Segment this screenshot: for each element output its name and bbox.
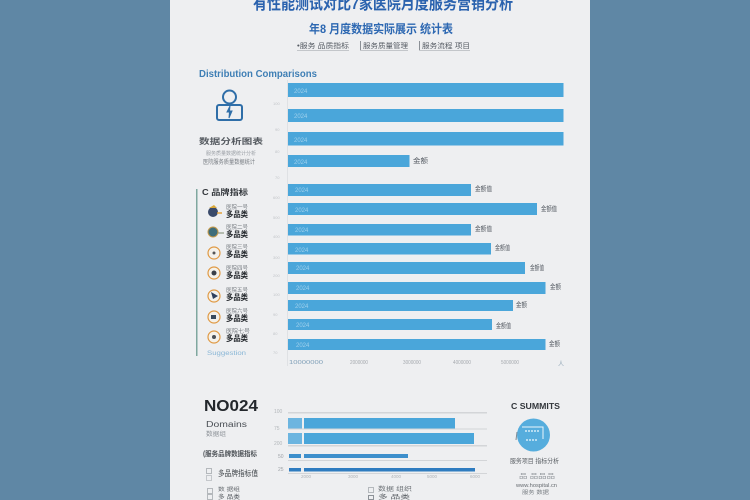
x axis labels: 3000000	[403, 360, 421, 366]
x axis labels: 4000000	[453, 360, 471, 366]
axis tick labels: 500	[273, 215, 280, 220]
bar inner labels: 2024	[294, 138, 308, 144]
legend item 2	[208, 223, 248, 239]
legend item 4	[208, 264, 248, 280]
axis tick labels: 100	[273, 101, 280, 106]
legend panel	[196, 187, 251, 357]
bottom left heading: 数据组	[206, 430, 226, 438]
legend item 1: 医院一号	[226, 203, 248, 211]
chart legend: 数据 组织	[378, 485, 412, 493]
x axis labels	[289, 360, 564, 368]
right column: www.hospital.cn	[516, 483, 557, 489]
right column: 服务 数据	[522, 489, 549, 496]
legend item 6	[208, 307, 248, 323]
tag row: 服务质量管理	[363, 41, 408, 50]
bar value labels: 金额	[413, 156, 428, 165]
bar value labels: 金额	[550, 282, 561, 291]
right column	[510, 402, 561, 496]
bar value labels: 金额值	[495, 243, 510, 252]
bottom left list: 数 据组	[218, 486, 240, 493]
axis tick labels: 300	[273, 255, 280, 260]
legend item 3: 医院三号	[226, 243, 248, 251]
bar inner labels: 2024	[296, 323, 310, 329]
bar value labels: 金额值	[541, 204, 557, 213]
bar value labels: 金额值	[530, 263, 544, 272]
legend footer: Suggestion	[207, 351, 246, 357]
axis tick labels	[273, 101, 280, 355]
legend item 4: 医院四号	[226, 264, 248, 272]
bar inner labels: 2024	[295, 188, 309, 194]
axis tick labels: 80	[273, 331, 278, 336]
axis labels: 2000	[301, 474, 312, 479]
x axis labels: 2000000	[350, 360, 368, 366]
axis tick labels: 100	[273, 292, 280, 297]
legend item 1	[208, 203, 248, 219]
legend item 3	[208, 243, 248, 259]
tag row: •服务 品质指标	[297, 41, 349, 50]
legend item 5	[208, 286, 248, 302]
bar inner labels: 2024	[294, 160, 308, 166]
bar value labels: 金额值	[475, 224, 492, 233]
axis labels: 50	[278, 454, 284, 460]
legend item 7: 医院七号	[226, 327, 251, 335]
icon: blue circle	[516, 418, 550, 452]
axis labels: 25	[278, 467, 284, 473]
legend item 6: 多品类	[226, 313, 248, 323]
right column: 服务项目 指标分析	[510, 456, 559, 465]
tag row	[297, 41, 470, 51]
bars	[288, 83, 564, 350]
grid lines	[288, 412, 487, 474]
axis tick labels: 80	[275, 149, 280, 154]
axis tick labels: 70	[273, 350, 278, 355]
bar inner labels: 2024	[295, 248, 309, 254]
axis tick labels: 70	[275, 175, 280, 180]
axis labels: 200	[274, 441, 283, 447]
summary label: 数据分析图表	[199, 136, 263, 146]
legend item 6: 医院六号	[226, 307, 248, 315]
right column: 品 品品品	[519, 472, 555, 480]
panel: page sheet	[170, 0, 590, 500]
legend item 4: 多品类	[226, 270, 248, 280]
bar inner labels: 2024	[295, 208, 309, 214]
legend heading: C 品牌指标	[202, 187, 248, 197]
section heading: Distribution Comparisons	[199, 69, 317, 80]
bar value labels: 金额	[516, 300, 527, 309]
legend item 5: 多品类	[226, 292, 248, 302]
bar inner labels: 2024	[295, 228, 309, 234]
axis labels: 5000	[427, 474, 438, 479]
bar value labels: 金额	[549, 339, 560, 348]
tag row: 服务流程 项目	[422, 41, 470, 50]
bottom left heading: NO024	[204, 398, 258, 415]
bottom left list: 多品牌指标值	[218, 468, 258, 478]
bottom left list	[203, 449, 258, 500]
main bar chart	[273, 80, 564, 368]
axis labels: 75	[274, 426, 280, 432]
summary label: 服务质量数据统计分析	[206, 150, 256, 157]
icon: person with badge	[217, 90, 242, 120]
legend item 5: 医院五号	[226, 286, 248, 294]
legend item 3: 多品类	[226, 249, 248, 259]
right column: C SUMMITS	[511, 402, 561, 411]
axis tick labels: 90	[273, 312, 278, 317]
bar inner labels: 2024	[296, 266, 310, 272]
bar inner labels: 2024	[294, 114, 308, 120]
bottom left heading: Domains	[206, 420, 247, 429]
bottom left list: (服务品牌数据指标	[203, 449, 257, 458]
bar inner labels: 2024	[295, 304, 309, 310]
x axis labels: 10000000	[289, 360, 323, 366]
axis tick labels: 400	[273, 234, 280, 239]
summary label	[199, 136, 263, 166]
bar value labels: 金额值	[496, 321, 511, 330]
axis labels	[274, 409, 481, 479]
legend item 2: 医院二号	[226, 223, 248, 231]
axis labels: 3000	[348, 474, 359, 479]
legend item 1: 多品类	[226, 209, 248, 219]
bottom bar chart	[274, 409, 487, 500]
axis tick labels: 200	[273, 273, 280, 278]
axis labels: 100	[274, 409, 283, 415]
bar inner labels: 2024	[296, 343, 310, 349]
x axis labels: 5000000	[501, 360, 519, 366]
axis tick labels: 90	[275, 127, 280, 132]
chart legend	[368, 485, 412, 500]
bar inner labels	[294, 89, 310, 349]
bar inner labels: 2024	[296, 286, 310, 292]
bottom left heading	[204, 398, 258, 438]
summary label: 医院服务质量数据统计	[203, 158, 255, 166]
bar value labels: 金额值	[475, 184, 492, 193]
axis labels: 4000	[391, 474, 402, 479]
axis labels: 6000	[470, 474, 481, 479]
legend item 7	[208, 327, 251, 343]
legend item 2: 多品类	[226, 229, 248, 239]
bars	[288, 418, 475, 472]
subtitle: 年8 月度数据实际展示 统计表	[309, 21, 453, 36]
axis tick labels: 600	[273, 195, 280, 200]
bar value labels	[413, 156, 561, 348]
bar inner labels: 2024	[294, 89, 308, 95]
x axis labels: 人	[558, 361, 564, 368]
legend item 7: 多品类	[226, 333, 248, 343]
